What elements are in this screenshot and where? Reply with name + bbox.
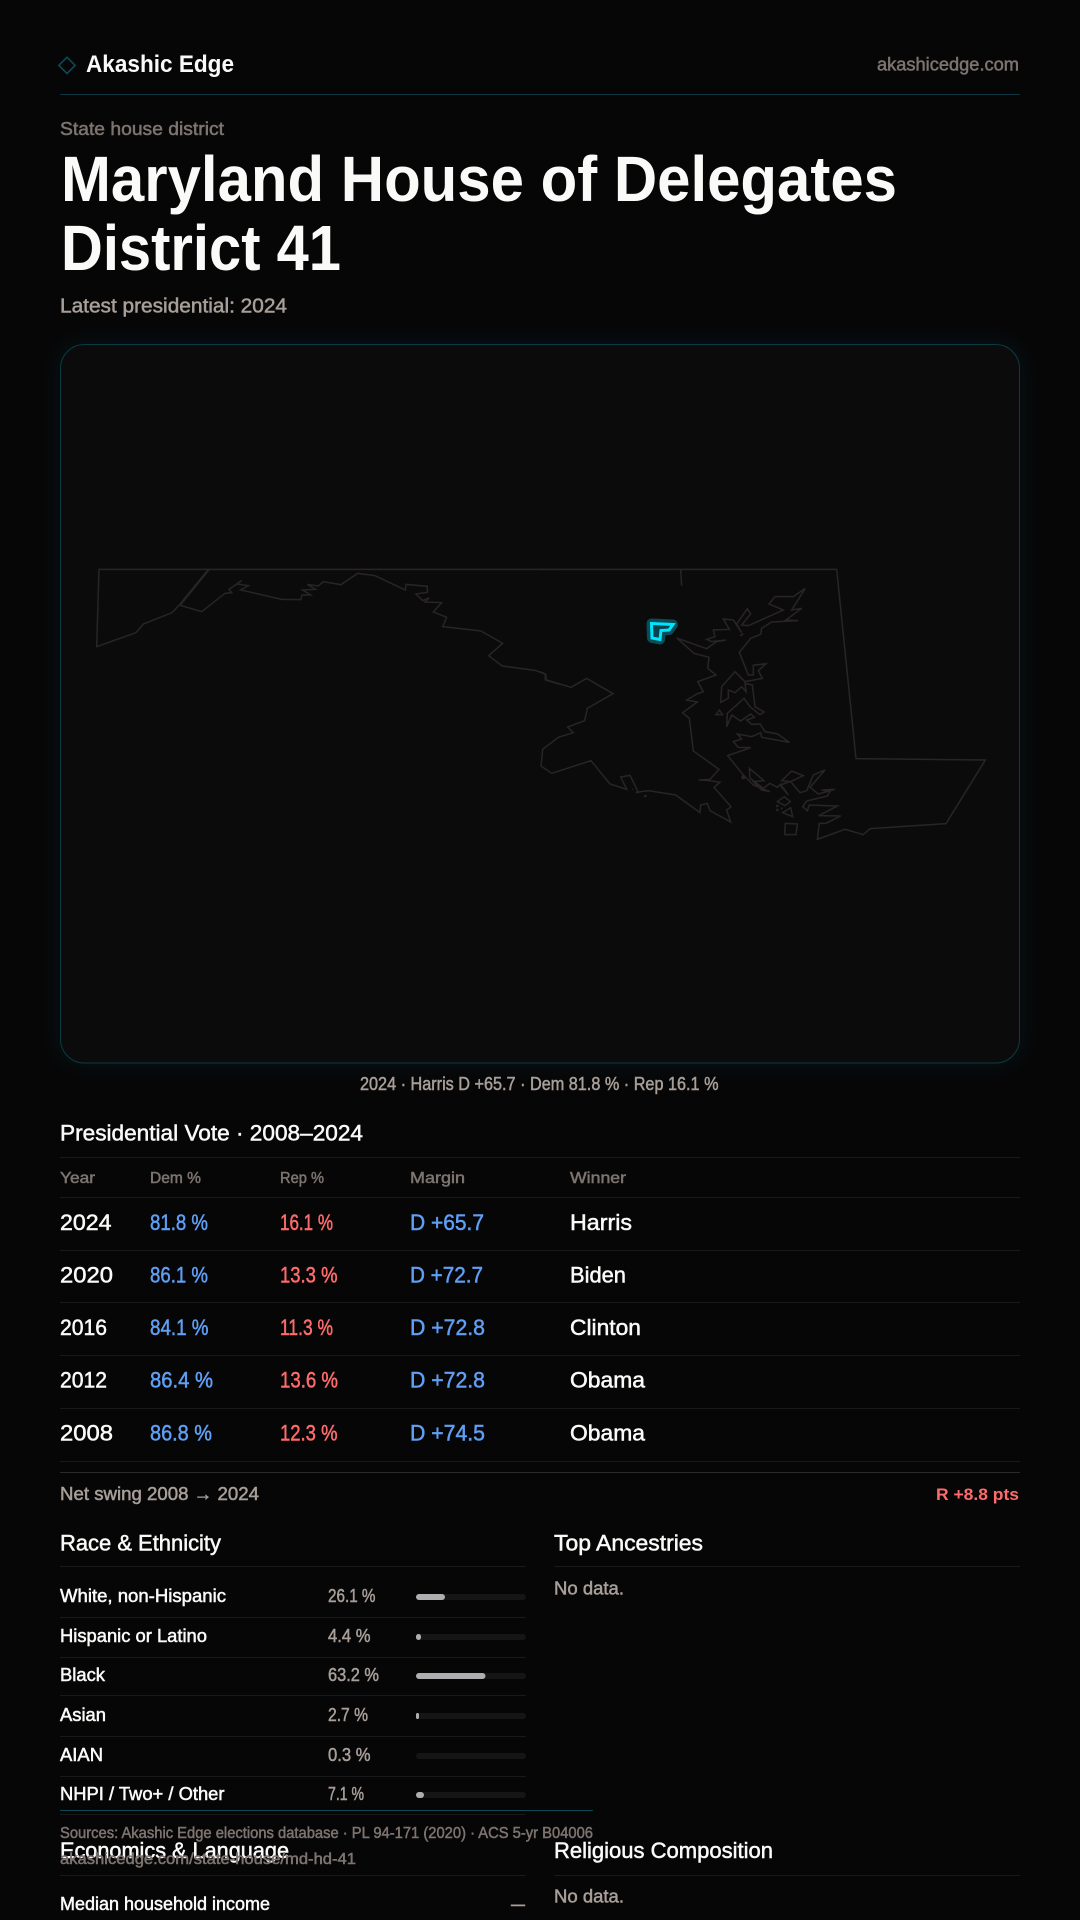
row: 2008: D +74.5 bbox=[410, 1420, 485, 1446]
footer: sources and url: Sources: Akashic Edge elections database · PL 94-171 (2020) · ACS 5-yr B04006 bbox=[60, 1825, 593, 1842]
row: black bbox=[60, 1665, 526, 1685]
panel: religious composition: Religious Composition bbox=[554, 1838, 773, 1863]
row: 2024 bbox=[60, 1210, 632, 1235]
row: 2024: 2024 bbox=[60, 1210, 112, 1235]
row: hispanic bbox=[60, 1626, 526, 1646]
table header row: Year bbox=[60, 1170, 96, 1187]
row: 2020: 13.3 % bbox=[280, 1262, 338, 1288]
site url: akashicedge.com bbox=[877, 54, 1019, 74]
row: aian: AIAN bbox=[60, 1745, 103, 1765]
row: 2016: D +72.8 bbox=[410, 1315, 485, 1340]
row: 2008: 86.8 % bbox=[150, 1420, 212, 1446]
subtitle: Latest presidential: 2024 bbox=[60, 296, 287, 318]
table header row: Margin bbox=[410, 1170, 465, 1187]
row: 2012: 13.6 % bbox=[280, 1368, 338, 1392]
row: 2012 bbox=[60, 1368, 646, 1392]
panel: top ancestries bbox=[554, 1530, 1020, 1598]
icon: brand diamond bbox=[59, 57, 75, 73]
brand name: Akashic Edge bbox=[86, 51, 234, 78]
table: presidential vote bbox=[60, 1158, 1020, 1462]
title: Maryland House of Delegates bbox=[61, 143, 897, 215]
row: nhpi two or more other bbox=[60, 1784, 526, 1804]
row: asian bbox=[60, 1705, 526, 1725]
panel: economics and language bbox=[60, 1838, 526, 1914]
map: Maryland eastern outline and bay bbox=[540, 569, 985, 839]
row: 2016: 11.3 % bbox=[280, 1315, 333, 1340]
map caption: 2024 · Harris D +65.7 · Dem 81.8 % · Rep 16.1 % bbox=[360, 1074, 718, 1094]
row: nhpi two or more other: 7.1 % bbox=[328, 1784, 364, 1804]
row: 2012: 86.4 % bbox=[150, 1368, 213, 1392]
row: 2020 bbox=[60, 1262, 626, 1288]
row: 2020: 86.1 % bbox=[150, 1262, 208, 1288]
table header row bbox=[60, 1170, 627, 1187]
row: 2024: 81.8 % bbox=[150, 1210, 208, 1235]
title bbox=[61, 143, 897, 284]
map: Maryland western outline bbox=[97, 569, 560, 684]
footer: sources and url bbox=[60, 1810, 593, 1868]
row: 2012: D +72.8 bbox=[410, 1368, 485, 1392]
row: 2020: Biden bbox=[570, 1262, 626, 1288]
row: 2008: Obama bbox=[570, 1420, 646, 1446]
panel: top ancestries: Top Ancestries bbox=[554, 1530, 703, 1556]
footer: sources and url: akashicedge.com/state-house/md-hd-41 bbox=[60, 1851, 356, 1868]
row: aian: 0.3 % bbox=[328, 1745, 370, 1765]
panel: economics and language: — bbox=[511, 1894, 525, 1914]
district type label: State house district bbox=[60, 119, 224, 139]
row: white bbox=[60, 1586, 526, 1606]
section heading: presidential vote: Presidential Vote · 2008–2024 bbox=[60, 1120, 363, 1146]
table header row: Winner bbox=[570, 1170, 627, 1187]
net swing row bbox=[60, 1484, 1019, 1504]
net swing row: Net swing 2008 → 2024 bbox=[60, 1484, 259, 1504]
row: black: Black bbox=[60, 1665, 106, 1685]
row: 2008: 2008 bbox=[60, 1420, 113, 1446]
title: District 41 bbox=[61, 212, 341, 284]
header bar bbox=[59, 51, 1019, 78]
panel: map bbox=[60, 344, 1020, 1063]
table header row: Dem % bbox=[150, 1170, 201, 1187]
panel: economics and language: Median household income bbox=[60, 1894, 270, 1914]
row: asian: Asian bbox=[60, 1705, 106, 1725]
row: 2012: Obama bbox=[570, 1368, 646, 1392]
row: 2016: 84.1 % bbox=[150, 1315, 208, 1340]
panel: religious composition: No data. bbox=[554, 1886, 624, 1906]
row: asian: 2.7 % bbox=[328, 1705, 368, 1725]
net swing row: R +8.8 pts bbox=[936, 1485, 1019, 1504]
heading: race and ethnicity: Race & Ethnicity bbox=[60, 1530, 221, 1556]
row: white: White, non-Hispanic bbox=[60, 1586, 226, 1606]
row: 2012: 2012 bbox=[60, 1368, 107, 1392]
row: 2008: 12.3 % bbox=[280, 1420, 338, 1446]
row: 2020: D +72.7 bbox=[410, 1262, 483, 1288]
row: hispanic: Hispanic or Latino bbox=[60, 1626, 207, 1646]
row: 2024: 16.1 % bbox=[280, 1210, 333, 1235]
panel: religious composition bbox=[554, 1838, 1020, 1906]
panel: top ancestries: No data. bbox=[554, 1578, 624, 1598]
row: 2008 bbox=[60, 1420, 646, 1446]
row: hispanic: 4.4 % bbox=[328, 1626, 370, 1646]
row: 2016: Clinton bbox=[570, 1315, 641, 1340]
row: 2024: Harris bbox=[570, 1210, 632, 1235]
table header row: Rep % bbox=[280, 1170, 324, 1187]
panel: economics and language: Economics & Language bbox=[60, 1838, 289, 1863]
row: 2016: 2016 bbox=[60, 1315, 107, 1340]
row: white: 26.1 % bbox=[328, 1586, 376, 1606]
row: 2024: D +65.7 bbox=[410, 1210, 484, 1235]
panel: race and ethnicity bbox=[60, 1530, 526, 1814]
map: highlighted district 41 bbox=[652, 624, 673, 640]
row: nhpi two or more other: NHPI / Two+ / Other bbox=[60, 1784, 224, 1804]
row: black: 63.2 % bbox=[328, 1665, 379, 1685]
row: 2020: 2020 bbox=[60, 1262, 113, 1288]
row: aian bbox=[60, 1745, 526, 1765]
row: 2016 bbox=[60, 1315, 641, 1340]
